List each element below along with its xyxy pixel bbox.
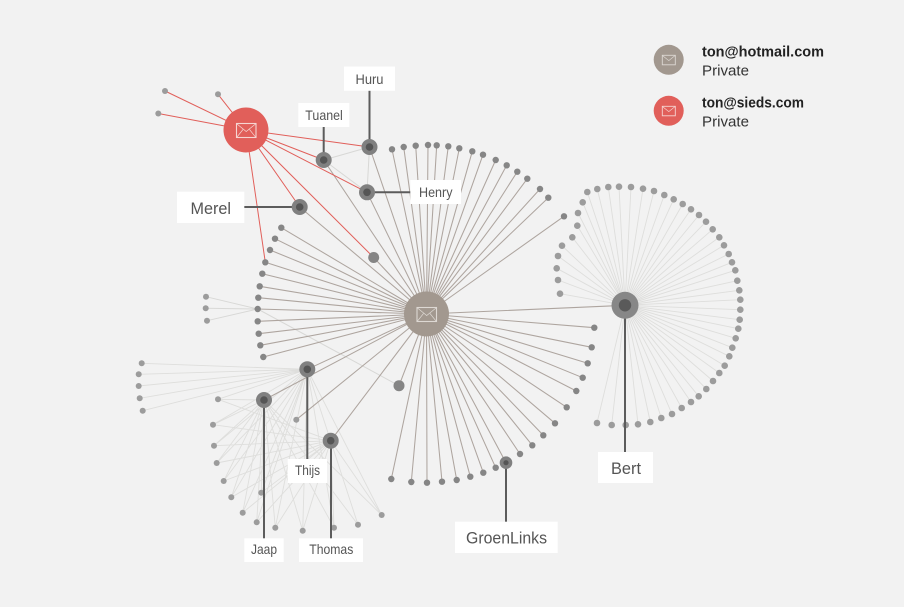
node: Thijs	[299, 361, 315, 377]
label: Henry: Henry	[419, 184, 452, 200]
node: Thomas	[323, 433, 339, 449]
hub: ton@hotmail.com	[404, 292, 449, 336]
node: Tuanel	[316, 152, 332, 168]
label: Huru: Huru	[356, 71, 384, 87]
label: Jaap	[244, 538, 284, 562]
leaf nodes: lower-left cluster and strays	[136, 88, 385, 534]
links: red hub	[158, 91, 374, 262]
label: Huru	[344, 66, 395, 91]
legend item: ton@sieds.com: Private	[702, 114, 749, 130]
links: small side groups	[206, 147, 399, 386]
legend item: ton@hotmail.com: ton@hotmail.com	[702, 45, 824, 61]
label: Bert	[598, 452, 653, 483]
label: Henry	[410, 180, 461, 204]
label: Tuanel: Tuanel	[305, 107, 343, 123]
label: Thijs	[288, 459, 327, 483]
node: Jaap	[256, 392, 272, 408]
label: Merel	[177, 192, 244, 223]
legend item: ton@sieds.com: ton@sieds.com	[702, 95, 804, 111]
label: Thijs: Thijs	[295, 462, 320, 478]
node: GroenLinks	[500, 456, 512, 469]
hub: ton@sieds.com	[224, 108, 268, 152]
node: Huru	[362, 139, 378, 155]
links: main hub fan	[258, 145, 625, 483]
node: Merel	[292, 199, 308, 215]
label: Tuanel	[298, 103, 349, 127]
label: Thomas	[299, 538, 363, 562]
node: Henry	[359, 184, 375, 200]
label: GroenLinks	[455, 522, 558, 553]
label: Bert: Bert	[611, 459, 641, 478]
label: Merel: Merel	[190, 199, 231, 218]
unlabeled mid nodes	[368, 252, 404, 391]
links: Bert fan	[557, 187, 740, 425]
node: Bert	[612, 292, 638, 319]
legend item: ton@hotmail.com: Private	[702, 62, 749, 80]
links: Thijs, Jaap and Thomas cluster	[139, 363, 382, 531]
legend item: ton@hotmail.com	[654, 45, 824, 80]
legend item: ton@sieds.com	[654, 95, 804, 130]
leaf nodes: Bert	[553, 183, 744, 428]
leaf nodes: main hub	[255, 142, 598, 486]
label: GroenLinks: GroenLinks	[466, 528, 547, 548]
legend	[654, 45, 824, 131]
labeled connector lines	[244, 90, 625, 539]
label: Thomas: Thomas	[309, 541, 353, 557]
label: Jaap: Jaap	[251, 541, 277, 557]
